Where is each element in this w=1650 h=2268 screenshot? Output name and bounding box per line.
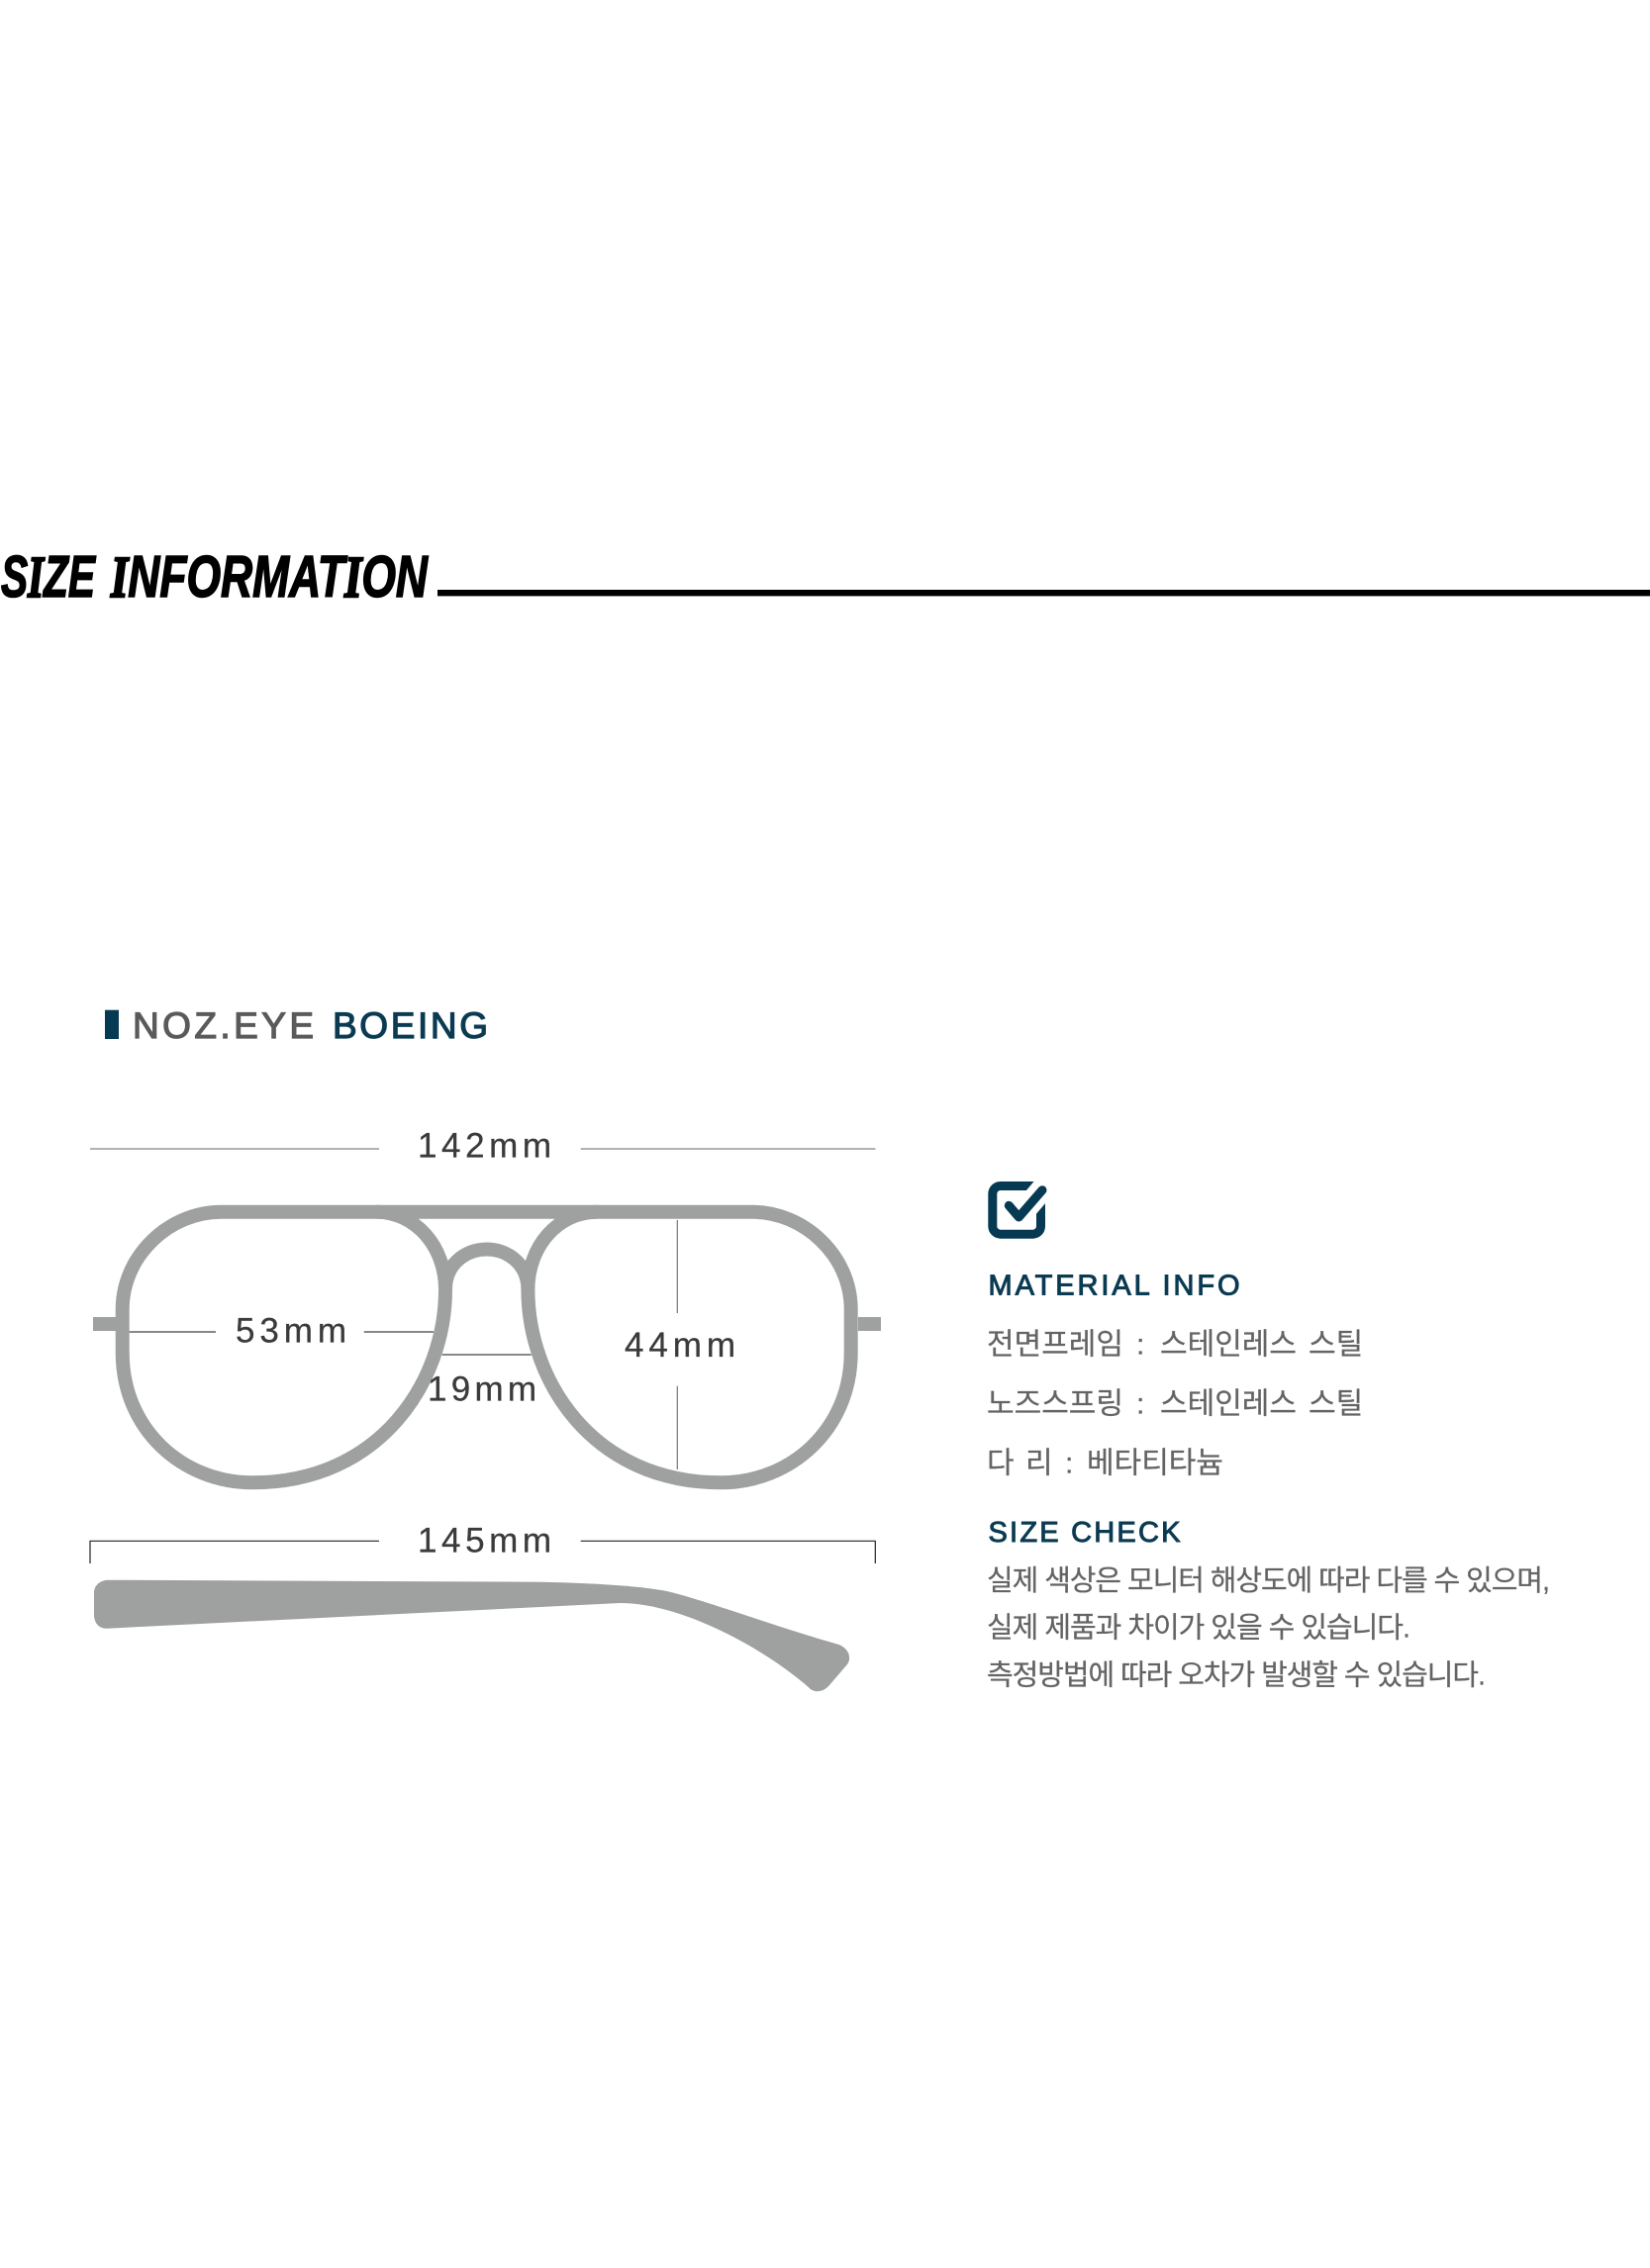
left hinge stub bbox=[93, 1317, 116, 1331]
temple length measurement: 145mm: 145mm bbox=[418, 1522, 551, 1559]
size check notes bbox=[987, 1565, 1550, 1692]
title: INFORMATION bbox=[110, 544, 429, 610]
model name: BOEING bbox=[333, 1005, 488, 1046]
heading marker bbox=[105, 1010, 119, 1039]
temple material: 다 bbox=[987, 1447, 1015, 1479]
title: SIZE bbox=[1, 544, 96, 610]
heading: material info: MATERIAL INFO bbox=[988, 1270, 1239, 1301]
info panel bbox=[987, 1177, 1550, 1692]
nose spring material: 스틸 bbox=[1309, 1387, 1363, 1420]
bridge width measurement: 19mm: 19mm bbox=[428, 1370, 536, 1409]
material list bbox=[987, 1328, 1363, 1479]
temple material: 리 bbox=[1025, 1447, 1053, 1479]
front frame material: 전면프레임 bbox=[987, 1328, 1123, 1361]
nose spring material: 스테인레스 bbox=[1160, 1387, 1297, 1420]
front frame material: 스틸 bbox=[1309, 1328, 1363, 1361]
top bar bbox=[376, 1205, 597, 1219]
front frame measurement: 142mm: 142mm bbox=[418, 1126, 551, 1166]
product heading bbox=[105, 1005, 488, 1046]
note line 2: 실제 제품과 차이가 있을 수 있습니다. bbox=[987, 1613, 1410, 1645]
note line 3: 측정방법에 따라 오차가 발생할 수 있습니다. bbox=[987, 1658, 1486, 1692]
right lens rim bbox=[528, 1212, 851, 1482]
nose spring material: : bbox=[1136, 1387, 1144, 1420]
icon: checkbox bbox=[993, 1177, 1053, 1234]
nose spring material: 노즈스프링 bbox=[987, 1387, 1123, 1420]
header rule bbox=[437, 590, 1650, 596]
lens width measurement: 53mm: 53mm bbox=[236, 1312, 346, 1351]
nose bridge bbox=[445, 1249, 528, 1289]
front frame material: : bbox=[1136, 1328, 1144, 1361]
temple arm side view bbox=[94, 1580, 849, 1691]
front frame material: 스테인레스 bbox=[1160, 1328, 1297, 1361]
brand name: NOZ.EYE bbox=[133, 1005, 314, 1046]
left lens rim bbox=[123, 1212, 445, 1482]
section header: size information bbox=[1, 544, 1650, 610]
lens height measurement: 44mm: 44mm bbox=[625, 1326, 735, 1365]
glasses front view bbox=[93, 1212, 881, 1482]
note line 1: 실제 색상은 모니터 해상도에 따라 다를 수 있으며, bbox=[987, 1565, 1550, 1597]
temple length measurement: 145mm bbox=[90, 1522, 875, 1563]
temple material: 베타티타늄 bbox=[1087, 1447, 1223, 1479]
right hinge stub bbox=[858, 1317, 881, 1331]
temple material: : bbox=[1065, 1447, 1073, 1479]
heading: size check: SIZE CHECK bbox=[988, 1517, 1181, 1549]
